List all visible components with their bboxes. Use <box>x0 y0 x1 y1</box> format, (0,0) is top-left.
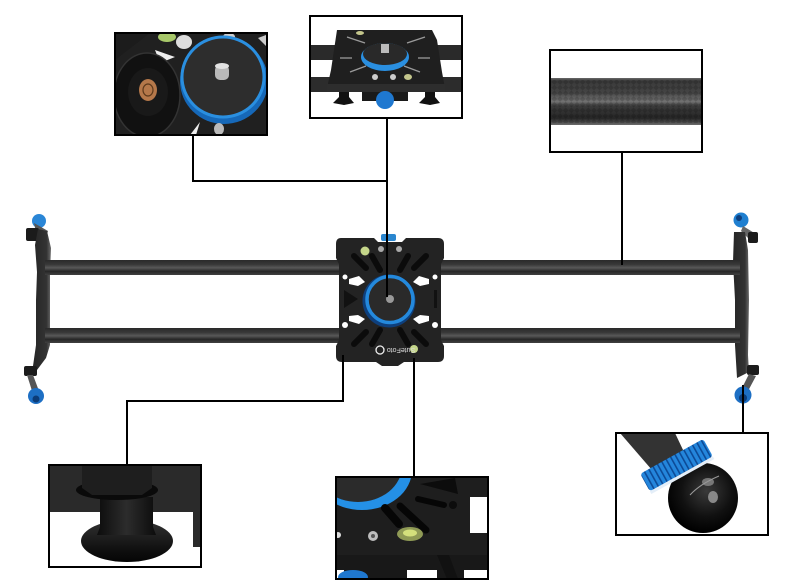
bubble level <box>360 246 370 256</box>
brand mark <box>376 346 384 354</box>
left end bracket <box>24 214 51 404</box>
carbon rail: bottom <box>45 328 740 343</box>
callout leader lines <box>127 118 743 477</box>
screw <box>368 531 378 541</box>
feet <box>333 92 354 105</box>
black mount disc with copper spring <box>114 53 180 137</box>
carriage plate: SuteFoto <box>387 346 415 353</box>
carbon rail: top <box>45 260 740 275</box>
knurled ring <box>640 439 714 494</box>
bubble level <box>397 527 423 541</box>
flared base <box>81 520 173 562</box>
levels and screws <box>372 74 378 80</box>
slider assembly <box>24 212 759 404</box>
inset: camera platform and mount <box>114 32 268 137</box>
washer <box>76 484 158 500</box>
plate slots <box>340 37 430 72</box>
blue knob <box>338 570 368 578</box>
blue platform ring <box>362 274 416 328</box>
inset: carbon fibre tube <box>550 50 702 152</box>
inset: bubble level <box>335 476 489 580</box>
neck <box>97 497 156 535</box>
carriage plate <box>336 238 444 366</box>
right end bracket <box>733 212 759 404</box>
hex nut <box>82 465 152 495</box>
inset: rail foot <box>49 465 201 567</box>
blue ring platform <box>361 43 409 71</box>
blue adjustment knob <box>381 234 396 241</box>
inset: ball end with blue knurled ring <box>616 433 768 535</box>
plate cut-outs <box>342 274 438 328</box>
blue ring platform <box>180 37 268 124</box>
slots <box>385 499 444 530</box>
inset: carriage with knob <box>310 16 462 118</box>
blue knob <box>376 91 394 109</box>
blue ring <box>337 478 411 510</box>
